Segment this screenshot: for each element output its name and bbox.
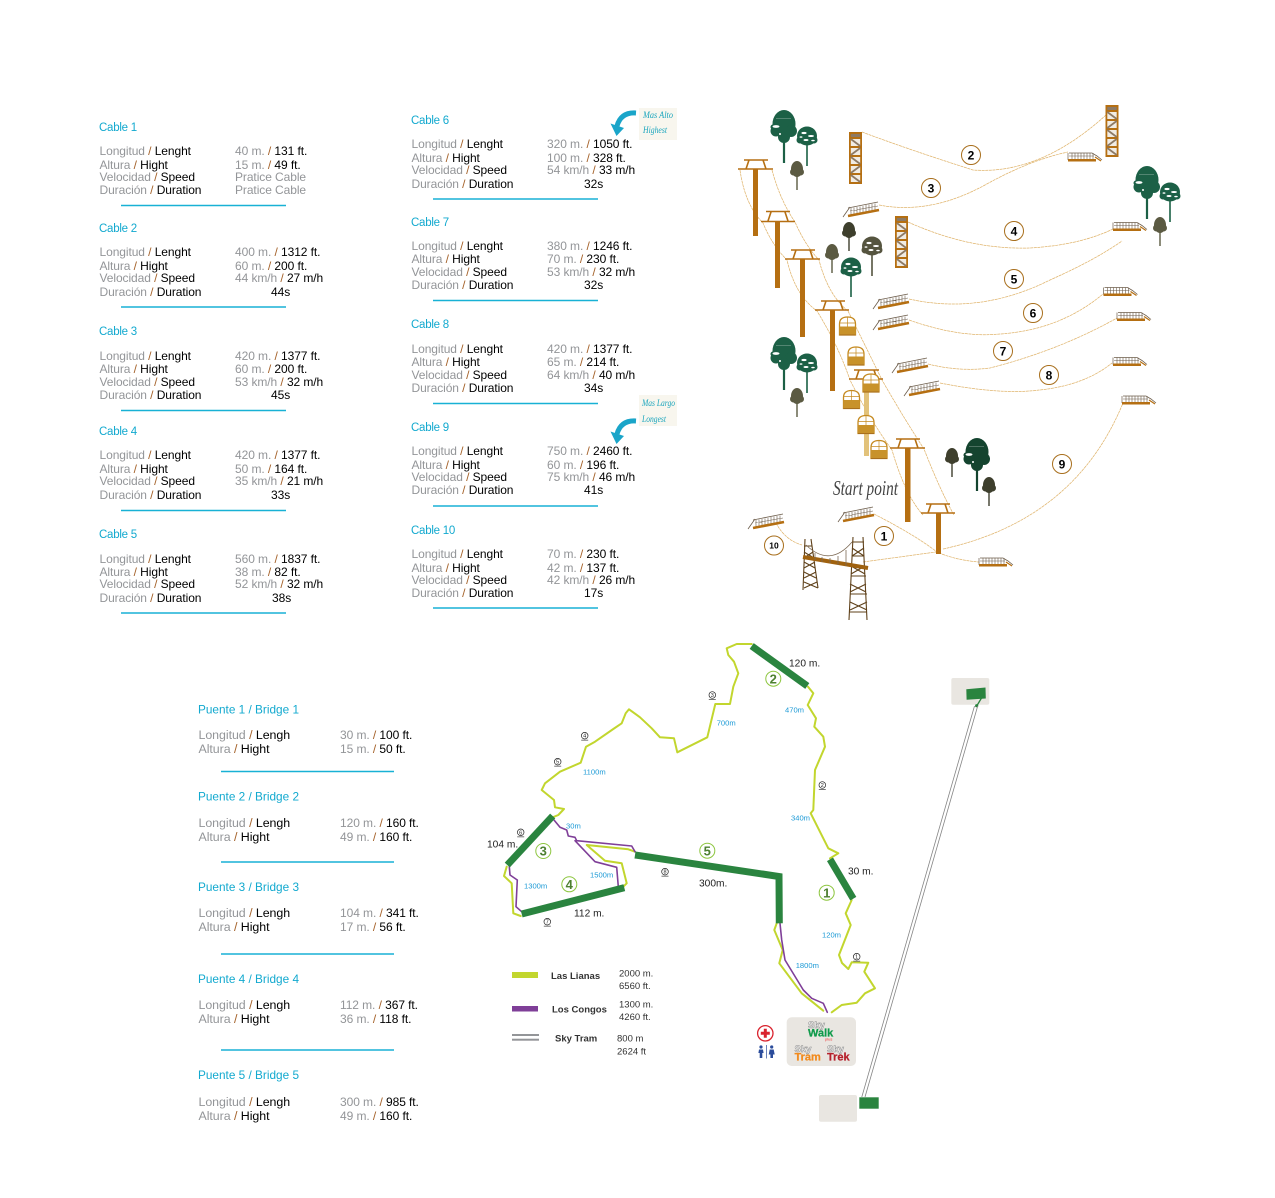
Cable 1 specs: 40 m. / 131 ft.	[235, 144, 307, 158]
logo: Sky Trek: Sky	[827, 1044, 845, 1055]
Cable 3 specs: Longitud / Lenght	[100, 349, 192, 363]
trail distance labels	[524, 706, 841, 970]
cable number badges: 5	[1011, 272, 1018, 286]
trail distance labels: 1800m	[796, 961, 819, 970]
Cable 8 specs: Longitud / Lenght	[412, 342, 504, 356]
Cable 10 specs: Longitud / Lenght	[412, 547, 504, 561]
Cable 3 specs: Altura / Hight	[100, 362, 169, 376]
Cable 2 specs: Velocidad / Speed	[100, 271, 195, 285]
panel: bridge specifications	[198, 702, 419, 1123]
trail station markers	[517, 692, 860, 962]
bridge number badges: 5	[704, 843, 711, 858]
Las Lianas trail	[504, 644, 875, 1012]
icon: restrooms	[758, 1045, 775, 1058]
trail distance labels: 30m	[566, 822, 581, 830]
icon: first aid	[758, 1026, 773, 1041]
trail station markers: 2	[821, 783, 824, 789]
Cable 9 specs: Altura / Hight	[412, 458, 481, 472]
Cable 6 specs: Velocidad / Speed	[412, 163, 507, 177]
Cable 7 specs: 53 km/h / 32 m/h	[547, 265, 635, 279]
panel: cable specifications right column	[411, 115, 635, 608]
Cable 7 specs: Cable 7	[411, 217, 449, 229]
Cable 4 specs: Cable 4	[99, 426, 138, 438]
legend: Sky Tram: 800 m	[617, 1034, 643, 1044]
callout: highest cable note	[610, 108, 677, 140]
Cable 5 specs: 52 km/h / 32 m/h	[235, 577, 323, 591]
Cable 6 specs: 32s	[584, 177, 603, 191]
Cable 4 specs: 420 m. / 1377 ft.	[235, 448, 320, 462]
Cable 4 specs: Duración / Duration	[100, 488, 201, 502]
Bridge 2 specs: 120 m. / 160 ft.	[340, 816, 419, 830]
bridge number badges: 2	[770, 671, 777, 686]
Cable 4 specs: 35 km/h / 21 m/h	[235, 474, 323, 488]
Cable 5 specs: Altura / Hight	[100, 565, 169, 579]
Bridge 4 specs: 36 m. / 118 ft.	[340, 1012, 411, 1026]
callout: longest cable note	[610, 395, 677, 444]
callout: highest cable note: Mas Alto	[642, 110, 673, 120]
Cable 9 specs: Longitud / Lenght	[412, 444, 504, 458]
Cable 8 specs: 420 m. / 1377 ft.	[547, 342, 632, 356]
Cable 1 specs: Longitud / Lenght	[100, 144, 192, 158]
Cable 1 specs	[99, 122, 307, 206]
cable number badges: 9	[1059, 457, 1066, 471]
start point label: Start point	[833, 476, 899, 500]
Cable 6 specs: Cable 6	[411, 115, 449, 127]
Cable 7 specs	[411, 217, 635, 300]
Bridge 1 specs	[198, 702, 412, 772]
Cable 9 specs	[411, 422, 635, 506]
Cable 9 specs: Velocidad / Speed	[412, 470, 507, 484]
logo: Sky Trek: Trek	[827, 1052, 851, 1064]
Cable 8 specs: Duración / Duration	[412, 381, 513, 395]
callout: highest cable note: Highest	[642, 125, 667, 135]
Cable 7 specs: Velocidad / Speed	[412, 265, 507, 279]
logo: Sky Tram: Tram	[794, 1052, 821, 1064]
Cable 7 specs: Longitud / Lenght	[412, 239, 504, 253]
legend: Las Lianas: Las Lianas	[551, 971, 600, 982]
Cable 10 specs: 70 m. / 230 ft.	[547, 547, 619, 561]
Cable 3 specs: 53 km/h / 32 m/h	[235, 375, 323, 389]
logo: Sky Walk: Walk	[808, 1028, 834, 1040]
legend	[512, 968, 653, 1058]
Cable 6 specs	[411, 115, 635, 199]
Cable 5 specs: Velocidad / Speed	[100, 577, 195, 591]
legend: Los Congos: 1300 m.	[619, 1000, 653, 1010]
Cable 9 specs: Duración / Duration	[412, 483, 513, 497]
Cable 9 specs: 60 m. / 196 ft.	[547, 458, 619, 472]
logo: Sky Walk	[808, 1020, 834, 1042]
logo: Sky Tram: Sky	[794, 1044, 812, 1055]
Bridge 3 specs: 104 m. / 341 ft.	[340, 906, 419, 920]
bridge number badges: 1	[823, 885, 830, 900]
Cable 8 specs	[411, 319, 635, 404]
Bridge 1 specs: 30 m. / 100 ft.	[340, 728, 412, 742]
logo: Sky Trek	[827, 1044, 851, 1064]
Cable 2 specs: Cable 2	[99, 223, 137, 235]
trail station markers: 4	[583, 734, 586, 740]
Bridge 4 specs: 112 m. / 367 ft.	[340, 998, 418, 1012]
Cable 4 specs: Altura / Hight	[100, 462, 169, 476]
Bridge 2 specs	[198, 790, 419, 862]
Cable 10 specs: 42 km/h / 26 m/h	[547, 573, 635, 587]
cable number badges: 10	[769, 540, 779, 550]
Cable 2 specs: Longitud / Lenght	[100, 245, 192, 259]
Cable 4 specs: Velocidad / Speed	[100, 474, 195, 488]
Cable 2 specs	[99, 223, 323, 307]
cable number badges: 1	[881, 529, 888, 543]
Cable 1 specs: Duración / Duration	[100, 183, 201, 197]
Cable 3 specs: 45s	[271, 388, 290, 402]
Cable 6 specs: 54 km/h / 33 m/h	[547, 163, 635, 177]
Cable 10 specs: 42 m. / 137 ft.	[547, 561, 619, 575]
Cable 10 specs: 17s	[584, 586, 603, 600]
Cable 7 specs: 380 m. / 1246 ft.	[547, 239, 632, 253]
Cable 8 specs: Cable 8	[411, 319, 449, 331]
Bridge 1 specs: Longitud / Lengh	[198, 728, 290, 742]
Cable 8 specs: Velocidad / Speed	[412, 368, 507, 382]
Cable 1 specs: Pratice Cable	[235, 183, 306, 197]
legend: Sky Tram: Sky Tram	[555, 1034, 597, 1044]
Cable 9 specs: 75 km/h / 46 m/h	[547, 470, 635, 484]
Cable 4 specs: 33s	[271, 488, 290, 502]
Cable 10 specs: Altura / Hight	[412, 561, 481, 575]
Los Congos trail	[509, 820, 827, 1012]
Bridge 3 specs: Altura / Hight	[198, 920, 270, 934]
logo panel	[787, 1017, 856, 1066]
Bridge 3 specs: 17 m. / 56 ft.	[340, 920, 406, 934]
Cable 7 specs: Altura / Hight	[412, 252, 481, 266]
Cable 7 specs: Duración / Duration	[412, 278, 513, 292]
tram cables	[862, 706, 978, 1097]
Cable 8 specs: 34s	[584, 381, 603, 395]
Cable 1 specs: Pratice Cable	[235, 170, 306, 184]
trail distance labels: 1300m	[524, 882, 547, 890]
Cable 10 specs: Duración / Duration	[412, 586, 513, 600]
illustration: trail map	[487, 644, 875, 1012]
trail station markers: 1	[855, 955, 858, 961]
bridge length labels: 112 m.	[574, 908, 604, 920]
logo: Sky Tram	[794, 1044, 821, 1064]
Cable 6 specs: Longitud / Lenght	[412, 137, 504, 151]
Cable 5 specs: 560 m. / 1837 ft.	[235, 552, 320, 566]
legend: Sky Tram: 2624 ft	[617, 1046, 646, 1058]
zip line cables	[740, 115, 1123, 562]
panel: cable specifications left column	[99, 122, 323, 613]
cable number badges: 7	[1000, 344, 1007, 358]
Cable 3 specs: Velocidad / Speed	[100, 375, 195, 389]
Bridge 1 specs: 15 m. / 50 ft.	[340, 742, 406, 756]
trail distance labels: 470m	[785, 706, 804, 714]
cable number badges	[764, 146, 1072, 555]
bridge length labels: 104 m.	[487, 840, 518, 850]
Cable 7 specs: 70 m. / 230 ft.	[547, 252, 619, 266]
bridge number badges: 4	[566, 877, 574, 892]
logo: Sky Walk: Sky	[808, 1020, 826, 1031]
Cable 5 specs: 38s	[272, 591, 291, 605]
callout: longest cable note: Mas Largo	[641, 398, 675, 408]
Cable 2 specs: Duración / Duration	[100, 285, 201, 299]
Cable 6 specs: 320 m. / 1050 ft.	[547, 137, 632, 151]
Cable 6 specs: Altura / Hight	[412, 151, 481, 165]
trail station markers: 8	[663, 870, 667, 876]
bridge length labels: 300m.	[699, 878, 727, 890]
Cable 1 specs: Velocidad / Speed	[100, 170, 195, 184]
cable support pylons	[738, 160, 955, 554]
Cable 8 specs: 65 m. / 214 ft.	[547, 355, 619, 369]
illustration: canopy cable map	[738, 105, 1180, 620]
Bridge 3 specs: Longitud / Lengh	[198, 906, 290, 920]
callout: longest cable note: Longest	[641, 414, 666, 424]
legend: Los Congos: 4260 ft.	[619, 1012, 651, 1023]
Cable 1 specs: 15 m. / 49 ft.	[235, 158, 301, 172]
Cable 2 specs: 400 m. / 1312 ft.	[235, 245, 320, 259]
Cable 1 specs: Altura / Hight	[100, 158, 169, 172]
trail station markers: 7	[546, 920, 549, 926]
legend: Las Lianas: 6560 ft.	[619, 981, 651, 992]
Bridge 4 specs: Longitud / Lengh	[198, 998, 290, 1012]
Bridge 5 specs	[198, 1068, 419, 1123]
Cable 2 specs: 44 km/h / 27 m/h	[235, 271, 323, 285]
Cable 8 specs: 64 km/h / 40 m/h	[547, 368, 635, 382]
Bridge 4 specs	[198, 972, 418, 1050]
logo: Sky Walk: plus	[825, 1036, 832, 1042]
trail distance labels: 1100m	[583, 768, 606, 776]
Bridge 5 specs: Puente 5 / Bridge 5	[198, 1068, 299, 1082]
trail station markers: 5	[556, 760, 559, 766]
Bridge 5 specs: Altura / Hight	[198, 1109, 270, 1123]
Cable 9 specs: 41s	[584, 483, 603, 497]
legend: Las Lianas	[512, 968, 653, 992]
top station	[951, 678, 989, 707]
Cable 3 specs	[99, 326, 323, 410]
Cable 8 specs: Altura / Hight	[412, 355, 481, 369]
gondolas	[840, 317, 887, 458]
trail station markers: 6	[519, 830, 522, 836]
cable number badges: 4	[1011, 224, 1018, 238]
Bridge 3 specs	[198, 880, 419, 954]
bridge number badges: 3	[540, 844, 547, 859]
suspension bridge	[803, 537, 868, 620]
Bridge 4 specs: Altura / Hight	[198, 1012, 270, 1026]
legend: Las Lianas: 2000 m.	[619, 968, 653, 980]
Cable 5 specs: Duración / Duration	[100, 591, 201, 605]
Bridge 5 specs: 300 m. / 985 ft.	[340, 1095, 419, 1109]
Bridge 3 specs: Puente 3 / Bridge 3	[198, 880, 299, 894]
Cable 2 specs: 44s	[271, 285, 290, 299]
bridge length labels	[487, 658, 873, 920]
Bridge 4 specs: Puente 4 / Bridge 4	[198, 972, 299, 986]
Bridge 2 specs: Longitud / Lengh	[198, 816, 290, 830]
Cable 10 specs: Cable 10	[411, 525, 455, 537]
Bridge 1 specs: Altura / Hight	[198, 742, 270, 756]
Cable 3 specs: 420 m. / 1377 ft.	[235, 349, 320, 363]
bridge length labels: 120 m.	[789, 658, 820, 670]
hanging bridges	[507, 646, 853, 923]
trail station markers: 3	[711, 693, 714, 699]
Cable 7 specs: 32s	[584, 278, 603, 292]
Cable 2 specs: Altura / Hight	[100, 259, 169, 273]
Cable 6 specs: 100 m. / 328 ft.	[547, 151, 626, 165]
legend: Los Congos: Los Congos	[552, 1004, 607, 1016]
Bridge 2 specs: Altura / Hight	[198, 830, 270, 844]
sky tram diagram	[819, 678, 989, 1122]
platforms	[748, 153, 1156, 566]
cable number badges: 8	[1046, 368, 1053, 382]
Cable 1 specs: Cable 1	[99, 122, 137, 134]
trail distance labels: 120m	[822, 930, 841, 940]
Cable 10 specs	[411, 525, 635, 608]
Cable 5 specs: Longitud / Lenght	[100, 552, 192, 566]
Cable 3 specs: 60 m. / 200 ft.	[235, 362, 307, 376]
cable number badges: 2	[968, 148, 975, 162]
Cable 5 specs: Cable 5	[99, 529, 137, 541]
Cable 2 specs: 60 m. / 200 ft.	[235, 259, 307, 273]
Cable 6 specs: Duración / Duration	[412, 177, 513, 191]
Bridge 2 specs: 49 m. / 160 ft.	[340, 830, 412, 844]
Cable 3 specs: Duración / Duration	[100, 388, 201, 402]
trail distance labels: 1500m	[590, 870, 613, 880]
bridge number badges	[536, 671, 834, 900]
Cable 4 specs: Longitud / Lenght	[100, 448, 192, 462]
Bridge 5 specs: 49 m. / 160 ft.	[340, 1109, 412, 1123]
legend: Los Congos	[512, 1000, 653, 1023]
trees	[770, 110, 1180, 506]
cable number badges: 6	[1030, 306, 1037, 320]
Cable 4 specs: 50 m. / 164 ft.	[235, 462, 307, 476]
Cable 9 specs: 750 m. / 2460 ft.	[547, 444, 632, 458]
trail distance labels: 700m	[717, 718, 736, 728]
trail distance labels: 340m	[791, 814, 810, 822]
Bridge 1 specs: Puente 1 / Bridge 1	[198, 702, 299, 716]
Bridge 5 specs: Longitud / Lengh	[198, 1095, 290, 1109]
bridge length labels: 30 m.	[848, 866, 873, 878]
bottom station	[819, 1095, 879, 1122]
Cable 4 specs	[99, 426, 323, 510]
Cable 10 specs: Velocidad / Speed	[412, 573, 507, 587]
Cable 3 specs: Cable 3	[99, 326, 137, 338]
cable number badges: 3	[928, 181, 935, 195]
Bridge 2 specs: Puente 2 / Bridge 2	[198, 790, 299, 804]
Cable 5 specs: 38 m. / 82 ft.	[235, 565, 301, 579]
Cable 5 specs	[99, 529, 323, 613]
lattice towers	[849, 105, 1118, 268]
Cable 9 specs: Cable 9	[411, 422, 449, 434]
legend: Sky Tram	[512, 1034, 646, 1058]
